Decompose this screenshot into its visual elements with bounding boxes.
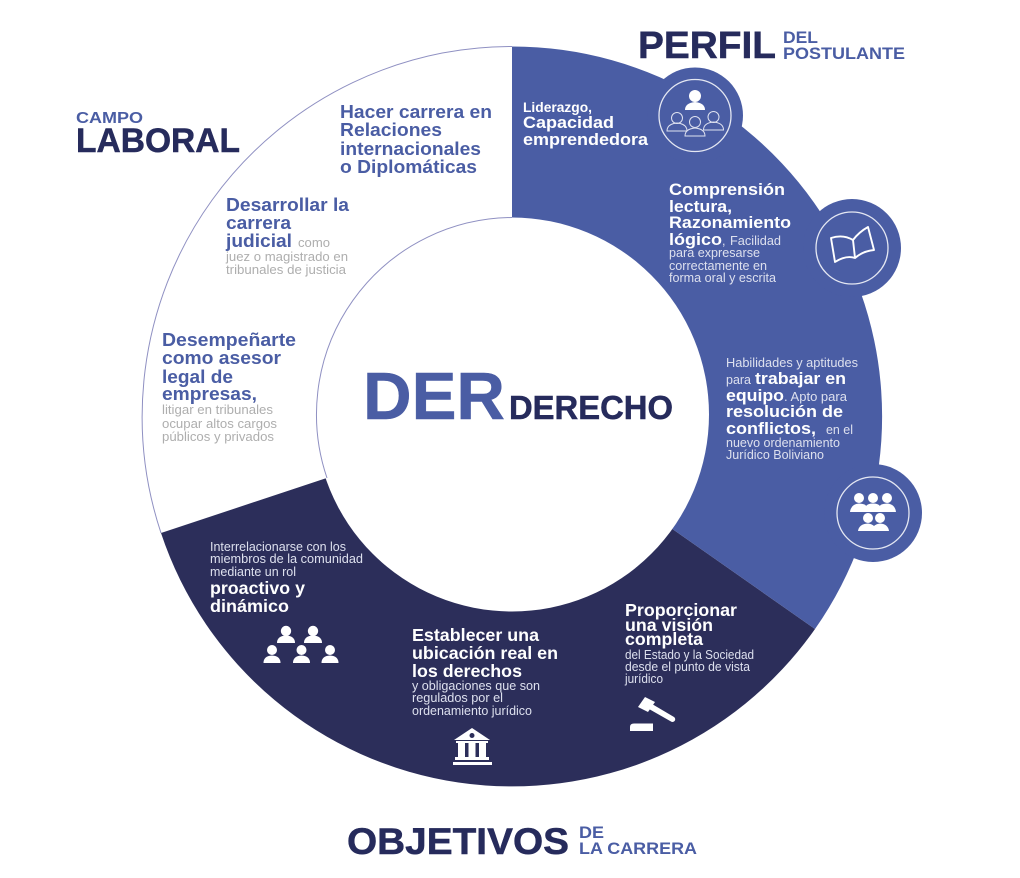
campo laboral item 2: como: [298, 235, 330, 250]
heading: objetivos de la carrera: OBJETIVOS: [347, 821, 569, 862]
campo laboral item 2: juez o magistrado en: [225, 249, 348, 264]
campo laboral item 3: ocupar altos cargos: [162, 416, 277, 431]
objetivos item 1: proactivo y: [210, 578, 305, 598]
heading: campo laboral: CAMPO: [76, 110, 143, 127]
perfil item 3: trabajar en: [755, 369, 846, 388]
perfil item 2: Comprensión: [669, 180, 785, 199]
perfil item 2: Razonamiento: [669, 213, 791, 232]
objetivos item 1: dinámico: [210, 596, 289, 616]
objetivos item 2: ubicación real en: [412, 643, 558, 663]
icon bubble: leadership: [647, 68, 743, 164]
campo laboral item 3: Desempeñarte: [162, 329, 296, 350]
objetivos item 2: regulados por el: [412, 690, 503, 705]
panel: campo laboral segment: [142, 46, 512, 533]
campo laboral item 1: internacionales: [340, 138, 481, 159]
perfil item 2: Facilidad: [730, 234, 781, 248]
perfil item 2: para expresarse: [669, 246, 760, 260]
perfil item 1: Liderazgo,: [523, 100, 592, 115]
objetivos item 3: [624, 600, 754, 686]
campo laboral item 3: como asesor: [162, 347, 281, 368]
campo laboral item 2: Desarrollar la: [226, 194, 350, 215]
perfil item 1: emprendedora: [523, 130, 649, 149]
objetivos item 3: completa: [625, 629, 703, 649]
campo laboral item 2: judicial: [225, 230, 292, 251]
heading: perfil del postulante: DEL: [783, 28, 818, 47]
campo laboral item 2: carrera: [226, 212, 292, 233]
campo laboral item 2: [225, 194, 350, 277]
campo laboral item 3: [162, 329, 296, 444]
campo laboral item 3: litigar en tribunales: [162, 402, 273, 417]
perfil item 3: en el: [826, 423, 853, 437]
heading: perfil del postulante: POSTULANTE: [783, 44, 905, 63]
heading: perfil del postulante: [638, 25, 905, 67]
objetivos item 3: jurídico: [624, 672, 663, 686]
icon: courthouse: [453, 728, 492, 765]
objetivos item 2: y obligaciones que son: [412, 678, 540, 693]
center title: DER: DER: [363, 359, 505, 434]
perfil item 2: lectura,: [669, 197, 732, 216]
objetivos item 1: Interrelacionarse con los: [210, 539, 346, 554]
icon bubble: team: [824, 464, 922, 562]
perfil item 2: ,: [722, 234, 725, 248]
heading: objetivos de la carrera: [347, 821, 697, 862]
center subtitle: DERECHO: DERECHO: [509, 389, 673, 426]
perfil item 1: [523, 100, 649, 149]
panel: objetivos segment: [161, 416, 815, 786]
perfil item 3: [726, 356, 858, 462]
perfil item 3: nuevo ordenamiento: [726, 436, 840, 450]
objetivos item 2: ordenamiento jurídico: [412, 703, 532, 718]
heading: objetivos de la carrera: LA CARRERA: [579, 839, 697, 858]
campo laboral item 1: Relaciones: [340, 119, 442, 140]
objetivos item 1: mediante un rol: [210, 564, 296, 579]
perfil item 3: Habilidades y aptitudes: [726, 356, 858, 370]
objetivos item 2: Establecer una: [412, 625, 539, 645]
perfil item 3: . Apto para: [784, 390, 847, 404]
panel: perfil segment: [512, 46, 922, 629]
perfil item 3: conflictos,: [726, 419, 816, 438]
perfil item 2: lógico: [669, 230, 722, 249]
campo laboral item 2: tribunales de justicia: [226, 262, 347, 277]
center circle: [315, 218, 709, 612]
objetivos item 3: una visión: [625, 615, 713, 635]
objetivos item 3: Proporcionar: [625, 600, 737, 620]
heading: campo laboral: LABORAL: [76, 122, 240, 160]
perfil item 3: equipo: [726, 386, 784, 405]
objetivos item 3: desde el punto de vista: [625, 660, 750, 674]
heading: perfil del postulante: PERFIL: [638, 25, 776, 67]
perfil item 3: resolución de: [726, 402, 843, 421]
campo laboral item 1: [340, 101, 492, 177]
campo laboral item 1: o Diplomáticas: [340, 156, 477, 177]
objetivos item 2: los derechos: [412, 661, 522, 681]
icon: gavel: [630, 697, 675, 731]
campo laboral item 3: legal de: [162, 366, 233, 387]
objetivos item 3: del Estado y la Sociedad: [625, 648, 754, 662]
campo laboral item 1: Hacer carrera en: [340, 101, 492, 122]
campo laboral item 3: públicos y privados: [162, 429, 274, 444]
perfil item 3: Jurídico Boliviano: [726, 448, 824, 462]
perfil item 2: [669, 180, 791, 285]
perfil item 1: Capacidad: [523, 113, 614, 132]
heading: objetivos de la carrera: DE: [579, 823, 604, 842]
icon bubble: book: [803, 199, 901, 297]
objetivos item 2: [412, 625, 558, 718]
objetivos item 1: miembros de la comunidad: [210, 551, 363, 566]
objetivos item 1: [210, 539, 363, 616]
perfil item 2: forma oral y escrita: [669, 271, 776, 285]
icon: community people: [264, 626, 338, 663]
campo laboral item 3: empresas,: [162, 383, 257, 404]
perfil item 3: para: [726, 373, 751, 387]
perfil item 2: correctamente en: [669, 259, 767, 273]
